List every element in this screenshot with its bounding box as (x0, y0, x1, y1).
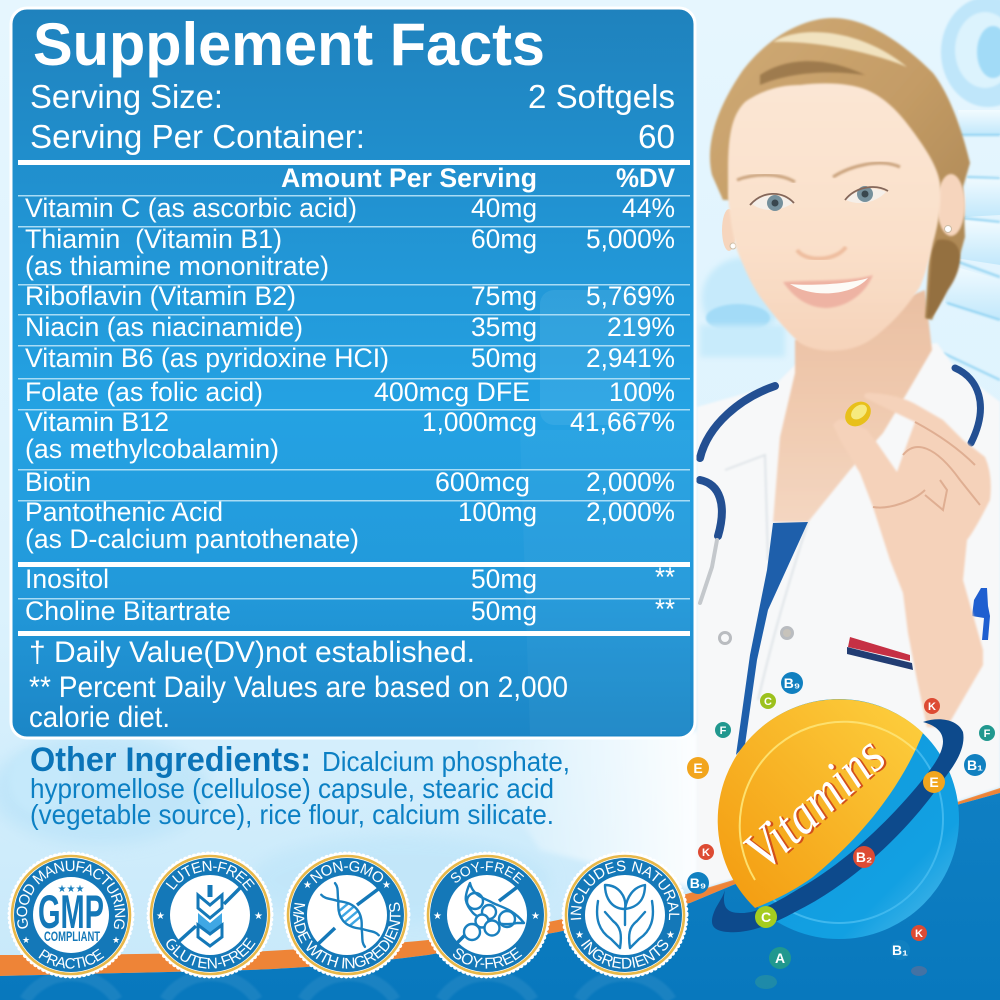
row: folate: Folate (as folic acid) (25, 377, 263, 407)
row: folate: 400mcg DFE (374, 377, 530, 407)
watermark coat (520, 430, 690, 735)
row: folate: 100% (609, 377, 675, 407)
badge text: LUTEN-FREE (166, 860, 255, 891)
badge text: ★ (531, 911, 540, 922)
orange swoosh (0, 788, 1000, 976)
row: riboflavin: 5,769% (586, 281, 675, 311)
blue floor (0, 793, 1000, 1000)
badge text: ★ (666, 930, 675, 941)
row: pantothenic acid (25, 497, 675, 554)
icon: crossed soybeans (455, 883, 524, 945)
badge text: NON-GMO (310, 860, 384, 884)
badge text (570, 860, 680, 969)
badge: natural ingredients (562, 852, 688, 978)
orange half (718, 699, 923, 908)
row: choline bitartrate: 50mg (471, 596, 537, 626)
panel: supplement facts (11, 8, 695, 738)
hand (833, 393, 991, 727)
hair shadow (760, 61, 865, 85)
row: inositol: ** (655, 562, 675, 592)
vitamin balls: B₉ (690, 875, 706, 891)
orbit ring (712, 719, 963, 932)
row: vitamin B12: 1,000mcg (422, 407, 537, 437)
badge text: ★ (433, 911, 442, 922)
vitamin balls: C (764, 696, 772, 708)
ice left of face (700, 258, 785, 357)
pocket stripe (847, 637, 913, 670)
serving information (30, 78, 675, 155)
badge text: INGREDIENTS (581, 939, 668, 969)
row: folate (25, 377, 675, 407)
hair highlight (773, 32, 907, 67)
row: thiamin: 5,000% (586, 224, 675, 254)
eyes and brows (737, 163, 900, 211)
vitamin balls: K (915, 928, 923, 940)
softgel capsule (840, 397, 876, 431)
planet disc (719, 699, 959, 939)
face (728, 83, 941, 351)
faded coat behind ingredients (470, 730, 700, 890)
badge text: SOY-FREE (453, 947, 522, 969)
other ingredients (30, 741, 570, 830)
row: niacin (25, 312, 675, 342)
coat (697, 343, 1000, 890)
serving information: Serving Size: (30, 78, 223, 115)
row: vitamin B12: 41,667% (570, 407, 675, 437)
serving information: 2 Softgels (528, 78, 675, 115)
badge text: MADE WITH INGREDIENTS (293, 902, 400, 969)
vitamins planet (712, 699, 963, 939)
row: niacin: 35mg (471, 312, 537, 342)
row: niacin: 219% (607, 312, 675, 342)
neck and chest (773, 290, 932, 522)
row: niacin: Niacin (as niacinamide) (25, 312, 303, 342)
icon: crossed DNA (317, 883, 381, 947)
coat buttons (720, 628, 792, 644)
row: biotin: Biotin (25, 467, 91, 497)
row: pantothenic acid: (as D-calcium pantothenate) (25, 524, 359, 554)
serving information: 60 (638, 118, 675, 155)
badge text: ★ (112, 936, 120, 946)
row: thiamin (25, 224, 675, 281)
GMP mark: COMPLIANT (44, 928, 100, 944)
vitamin balls: K (928, 701, 936, 713)
badge text: ★ (575, 930, 584, 941)
footnotes: † Daily Value(DV)not established. (29, 636, 475, 669)
doctor illustration (697, 18, 1000, 890)
coat shading (725, 455, 808, 700)
row: thiamin: (as thiamine mononitrate) (25, 251, 329, 281)
other ingredients: hypromellose (cellulose) capsule, stearic acid (30, 773, 554, 804)
badge text (433, 861, 540, 969)
vitamin balls: B₉ (784, 675, 800, 691)
vitamin balls: B₁ (967, 757, 983, 773)
badge text: ★ (382, 880, 391, 891)
row: vitamin C (25, 193, 675, 223)
badge text (16, 860, 126, 969)
bun shadow (927, 239, 960, 318)
vitamin balls: F (984, 728, 991, 740)
footnotes: calorie diet. (29, 701, 170, 734)
badge text: ★ (22, 936, 30, 946)
row: biotin: 2,000% (586, 467, 675, 497)
badge text: GLUTEN-FREE (166, 937, 256, 969)
row: choline bitartrate (25, 594, 675, 626)
vitamins lettering: Vitamins (735, 725, 900, 882)
row: vitamin B12: Vitamin B12 (25, 407, 169, 437)
table header: Amount Per Serving (281, 163, 537, 193)
vitamin balls: A (775, 950, 785, 966)
stethoscope (700, 368, 980, 603)
row: inositol: Inositol (25, 564, 109, 594)
GMP mark (38, 884, 104, 944)
footnotes (29, 636, 568, 734)
other ingredients: Other Ingredients: (30, 741, 311, 779)
row: riboflavin: Riboflavin (Vitamin B2) (25, 281, 296, 311)
row: choline bitartrate: Choline Bitartrate (25, 596, 231, 626)
row: thiamin: Thiamin (Vitamin B1) (25, 224, 282, 254)
badge: non-GMO (284, 852, 410, 978)
footnotes: ** Percent Daily Values are based on 2,000 (29, 671, 568, 704)
glass bands right (945, 110, 1000, 320)
other ingredients: Dicalcium phosphate, (322, 746, 570, 777)
serving information: Serving Per Container: (30, 118, 365, 155)
row: vitamin B12 (25, 407, 675, 464)
GMP mark: GMP (38, 885, 104, 938)
badge text (293, 860, 400, 969)
pen (972, 588, 990, 640)
row: biotin: 600mcg (435, 467, 530, 497)
badge text: SOY-FREE (450, 861, 524, 884)
badge text: PRACTICE (38, 948, 104, 969)
other ingredients: (vegetable source), rice flour, calcium silicate. (30, 799, 554, 830)
vitamin balls: B₂ (856, 849, 872, 865)
row: vitamin B6: 50mg (471, 343, 537, 373)
row: inositol: 50mg (471, 564, 537, 594)
table header: %DV (616, 163, 675, 193)
mouth (783, 275, 873, 308)
badge: soy free (424, 852, 550, 978)
icon: hands and leaves (597, 885, 653, 948)
row: vitamin C: 44% (622, 193, 675, 223)
row: pantothenic acid: Pantothenic Acid (25, 497, 223, 527)
row: pantothenic acid: 2,000% (586, 497, 675, 527)
table header (281, 163, 675, 193)
row: pantothenic acid: 100mg (458, 497, 537, 527)
GMP mark: ★★★ (58, 884, 84, 895)
badge text (156, 860, 263, 969)
vitamin balls: E (693, 760, 703, 776)
scrub top (736, 522, 808, 755)
row: riboflavin (25, 281, 675, 311)
watermark bottle (540, 290, 650, 425)
finger creases (873, 422, 980, 510)
row: vitamin C: 40mg (471, 193, 537, 223)
row: choline bitartrate: ** (655, 594, 675, 624)
vitamin balls: B₁ (892, 942, 908, 958)
heading: Supplement Facts (33, 11, 545, 78)
vitamin balls: F (720, 725, 727, 737)
vitamin balls (687, 672, 995, 989)
row: vitamin B6: 2,941% (586, 343, 675, 373)
row: vitamin B12: (as methylcobalamin) (25, 434, 279, 464)
ice top right (941, 0, 1000, 107)
badge: gluten free (146, 852, 274, 978)
row: vitamin C: Vitamin C (as ascorbic acid) (25, 193, 357, 223)
row: inositol (25, 562, 675, 594)
row: vitamin B6: Vitamin B6 (as pyridoxine HCI) (25, 343, 389, 373)
badge text: GOOD MANUFACTURING (16, 860, 126, 930)
row: vitamin B6 (25, 343, 675, 373)
badge reflections (25, 975, 671, 1000)
row: thiamin: 60mg (471, 224, 537, 254)
vitamins lettering: Vitamins (732, 725, 897, 882)
ears and earrings (722, 174, 965, 251)
row: riboflavin: 75mg (471, 281, 537, 311)
badge text: ★ (156, 911, 165, 922)
hair (710, 18, 970, 320)
vitamin balls: C (761, 909, 771, 925)
vitamin balls: E (929, 774, 939, 790)
vitamin balls: K (702, 847, 710, 859)
icon: crossed wheat (176, 885, 242, 946)
badge: GMP (8, 852, 134, 978)
nose (797, 247, 846, 259)
badge text: INCLUDES NATURAL (570, 860, 680, 920)
badge text: ★ (303, 880, 312, 891)
badge text: ★ (254, 911, 263, 922)
row: biotin (25, 467, 675, 497)
